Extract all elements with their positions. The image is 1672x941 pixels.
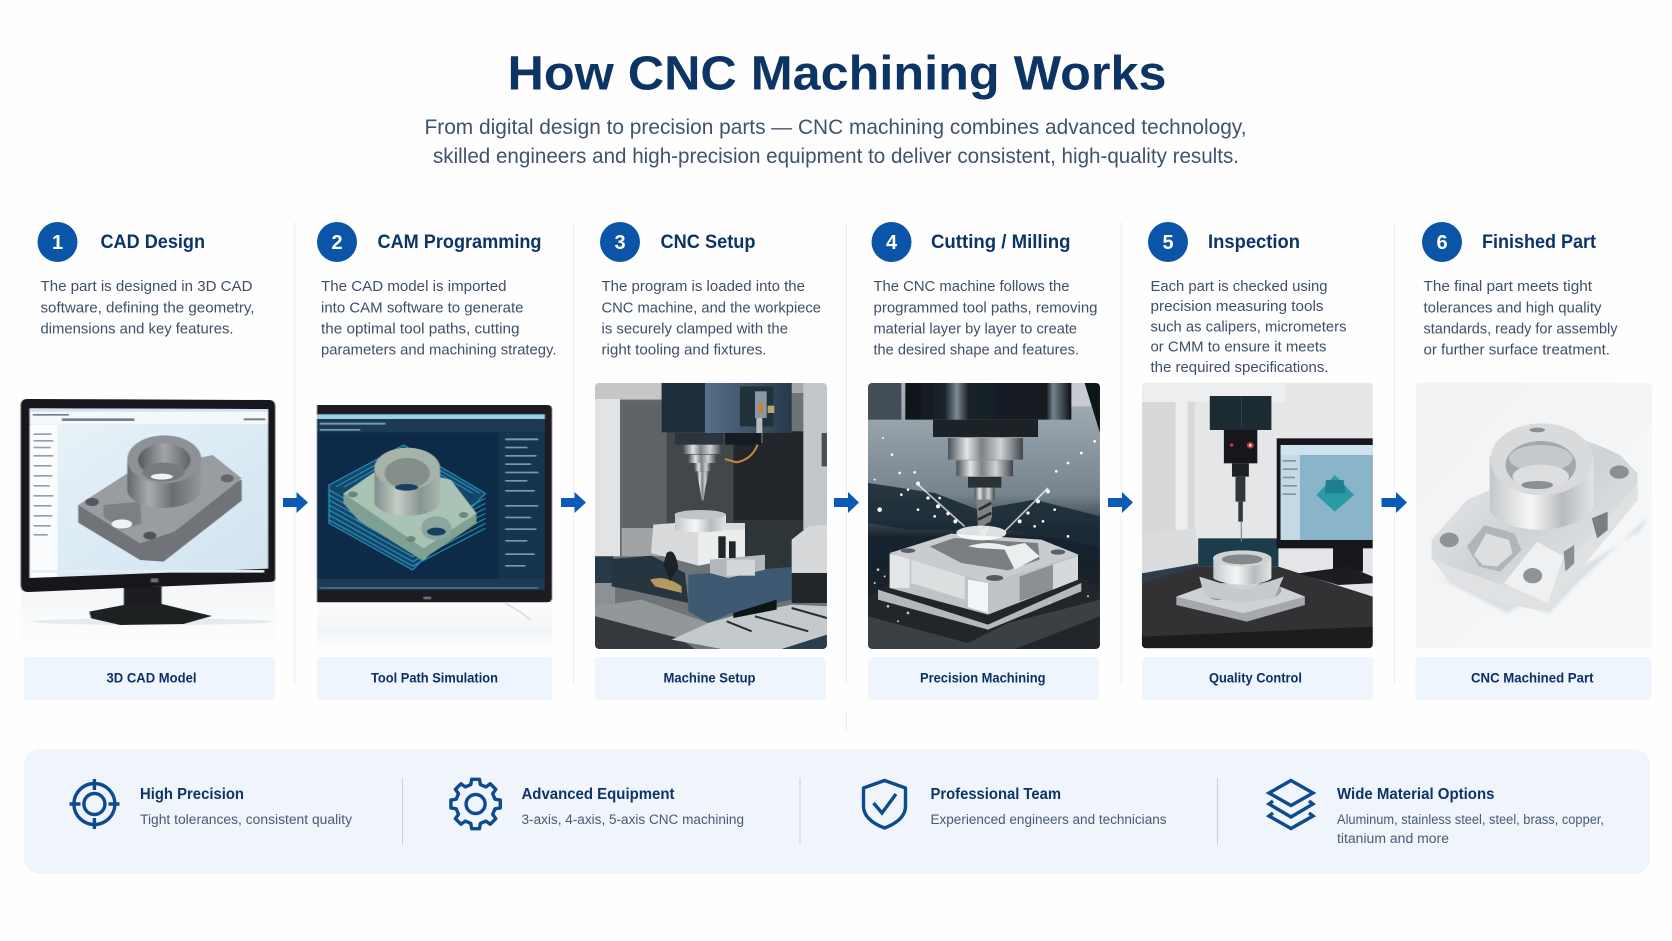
step 4 number badge: 4 <box>886 232 898 254</box>
caption: Machine Setup: Machine Setup <box>664 670 756 686</box>
step 6 description <box>1424 278 1618 358</box>
Wide Material Options text <box>1337 786 1604 846</box>
step 2 description: into CAM software to generate <box>321 300 524 316</box>
step 5 description: or CMM to ensure it meets <box>1150 338 1326 356</box>
step 1 description: The part is designed in 3D CAD <box>40 278 253 295</box>
step 2 description: The CAD model is imported <box>321 278 506 295</box>
step 2 number badge <box>317 222 357 262</box>
step 2: CAM Programming <box>317 222 556 648</box>
title: How CNC Machining Works <box>508 48 1166 100</box>
step 2 number badge: 2 <box>331 232 343 254</box>
Advanced Equipment text: Advanced Equipment <box>522 786 674 803</box>
caption: Quality Control <box>1142 657 1373 700</box>
step 6 number badge: 6 <box>1436 232 1448 254</box>
step 6 description: tolerances and high quality <box>1424 300 1602 316</box>
step 2 description: parameters and machining strategy. <box>321 342 556 358</box>
step 2 description: the optimal tool paths, cutting <box>321 320 520 338</box>
step 5 number badge <box>1148 222 1188 262</box>
step 5 description: precision measuring tools <box>1150 298 1324 315</box>
Professional Team text <box>930 786 1167 827</box>
arrow: step 5 to 6 <box>1382 492 1407 513</box>
icon: shield with check <box>864 780 906 828</box>
step 4 description: programmed tool paths, removing <box>874 300 1098 316</box>
Wide Material Options text: Wide Material Options <box>1337 786 1494 803</box>
step 3 heading: CNC Setup <box>660 231 756 253</box>
step 4 image: precision machining with coolant spray <box>868 383 1100 649</box>
caption: 3D CAD Model <box>24 657 275 700</box>
step 3 description: The program is loaded into the <box>602 278 805 295</box>
step 6 description: The final part meets tight <box>1424 278 1593 295</box>
step 4 description <box>874 278 1098 358</box>
step 4: Cutting / Milling <box>868 222 1100 649</box>
step 5 image: CMM quality control <box>1142 383 1373 648</box>
caption: Precision Machining: Precision Machining <box>920 670 1046 686</box>
step 2 description <box>321 278 556 358</box>
caption: CNC Machined Part: CNC Machined Part <box>1471 670 1594 686</box>
step 1 image: monitor with 3D CAD part <box>21 393 275 648</box>
caption: Tool Path Simulation: Tool Path Simulation <box>371 670 498 686</box>
step 6 description: standards, ready for assembly <box>1424 320 1618 338</box>
step 4 description: the desired shape and features. <box>874 342 1079 358</box>
step 6 description: or further surface treatment. <box>1424 342 1610 358</box>
step 1: CAD Design <box>21 222 275 648</box>
Advanced Equipment text: 3-axis, 4-axis, 5-axis CNC machining <box>522 812 744 827</box>
step 3 description: right tooling and fixtures. <box>602 342 766 358</box>
step 4 description: material layer by layer to create <box>874 320 1077 338</box>
arrow: step 3 to 4 <box>834 492 859 513</box>
arrow: step 1 to 2 <box>283 492 308 513</box>
step 1 description <box>40 278 254 338</box>
Wide Material Options text: Aluminum, stainless steel, steel, brass, copper, <box>1337 812 1604 827</box>
High Precision text <box>140 786 352 827</box>
arrow: step 4 to 5 <box>1108 492 1133 513</box>
step 5 description: such as calipers, micrometers <box>1150 318 1346 336</box>
Professional Team text: Experienced engineers and technicians <box>930 812 1167 827</box>
step 4 number badge <box>872 222 912 262</box>
step 3 number badge <box>600 222 640 262</box>
step 5 description: Each part is checked using <box>1150 278 1328 295</box>
step 3 image: machine setup <box>595 383 827 649</box>
subtitle: From digital design to precision parts — CNC machining combines advanced technology, <box>424 115 1246 139</box>
step 6: Finished Part <box>1416 222 1652 648</box>
step 4 description: The CNC machine follows the <box>874 278 1070 295</box>
subtitle <box>424 115 1246 168</box>
step 1 number badge <box>38 222 78 262</box>
step 1 description: dimensions and key features. <box>40 320 234 338</box>
step 4 heading: Cutting / Milling <box>931 231 1070 253</box>
Wide Material Options text: titanium and more <box>1337 831 1449 846</box>
icon: gear <box>451 779 500 829</box>
caption: Tool Path Simulation <box>317 657 552 700</box>
step 1 description: software, defining the geometry, <box>40 300 254 316</box>
caption: Machine Setup <box>595 657 826 700</box>
Advanced Equipment text <box>522 786 744 827</box>
step 3: CNC Setup <box>595 222 827 649</box>
step 1 number badge: 1 <box>52 232 63 254</box>
step 1 heading: CAD Design <box>100 231 205 253</box>
step 3 description: CNC machine, and the workpiece <box>602 300 821 316</box>
arrow: step 2 to 3 <box>561 492 586 513</box>
step 5 number badge: 5 <box>1162 232 1174 254</box>
icon: stacked layers <box>1269 780 1313 828</box>
Professional Team text: Professional Team <box>930 786 1061 803</box>
caption: 3D CAD Model: 3D CAD Model <box>106 670 196 686</box>
step 2 image: tool path simulation screen <box>317 405 552 648</box>
step 5 description: the required specifications. <box>1150 359 1328 376</box>
step 2 heading: CAM Programming <box>378 231 542 253</box>
subtitle: skilled engineers and high-precision equipment to deliver consistent, high-quality results. <box>433 144 1239 168</box>
caption: Quality Control: Quality Control <box>1209 670 1302 686</box>
step 5 heading: Inspection <box>1208 231 1300 253</box>
step 3 number badge: 3 <box>614 232 626 254</box>
panel: key capabilities <box>24 749 1650 874</box>
caption: Precision Machining <box>868 657 1099 700</box>
step 3 description: is securely clamped with the <box>602 320 788 338</box>
step 6 heading: Finished Part <box>1482 231 1596 253</box>
step 5 description <box>1150 278 1346 376</box>
High Precision text: High Precision <box>140 786 244 803</box>
icon: target crosshair <box>70 779 120 829</box>
High Precision text: Tight tolerances, consistent quality <box>140 812 352 827</box>
step 6 image: finished machined part <box>1416 383 1652 648</box>
step 6 number badge <box>1422 222 1462 262</box>
caption: CNC Machined Part <box>1416 657 1652 700</box>
step 5: Inspection <box>1142 222 1373 648</box>
step 3 description <box>602 278 821 358</box>
